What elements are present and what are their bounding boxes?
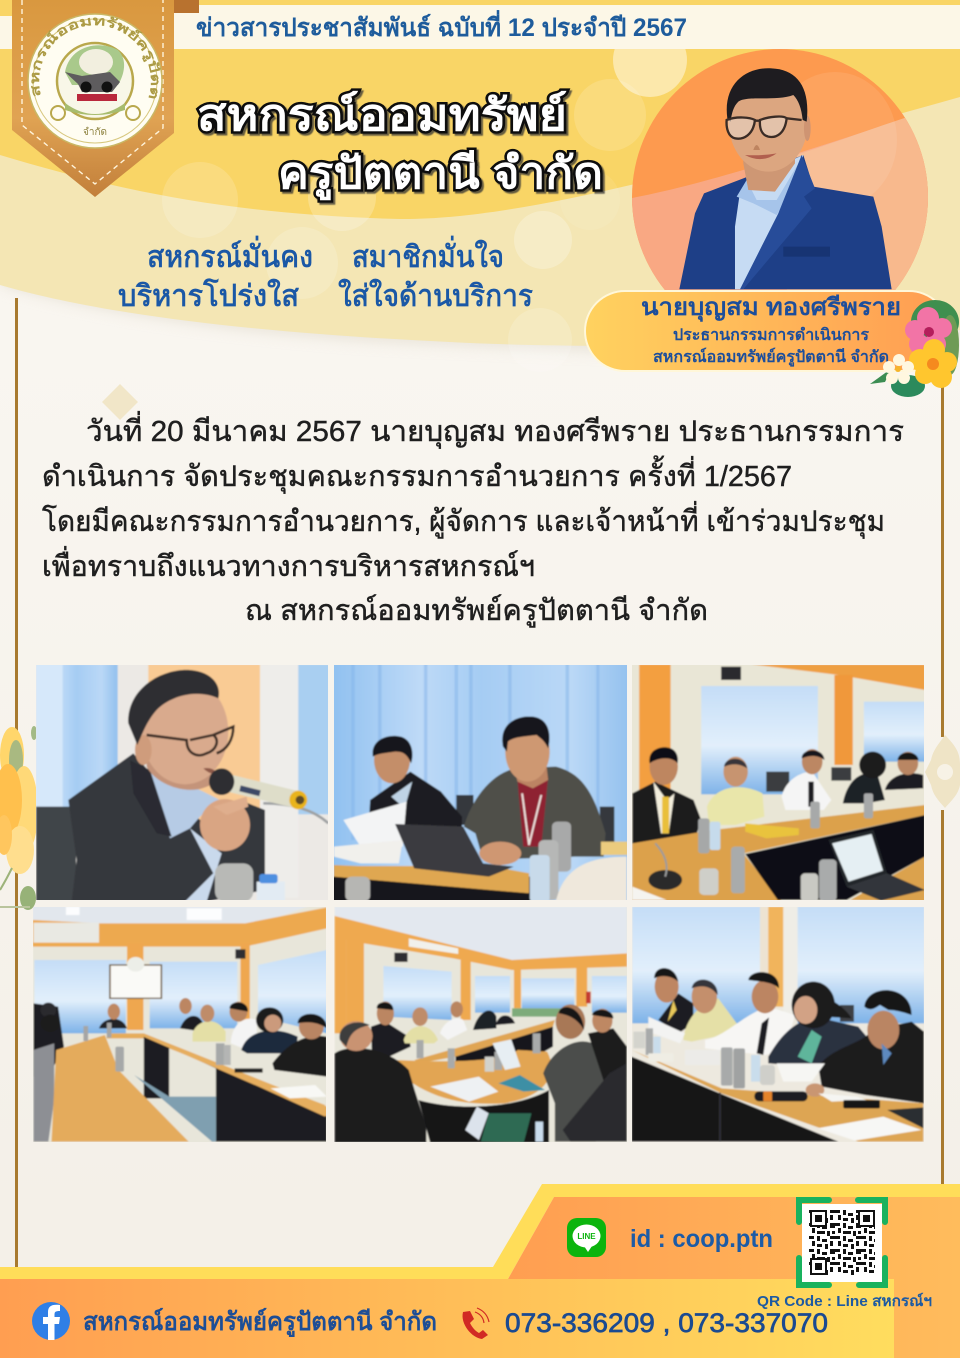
photo: chairman speaking into microphone (33, 663, 330, 902)
facebook page name: สหกรณ์ออมทรัพย์ครูปัตตานี จำกัด (83, 1307, 437, 1338)
phone numbers: 073-336209 , 073-337070 (505, 1308, 828, 1338)
QR caption: QR Code : Line สหกรณ์ฯ (757, 1292, 932, 1310)
slogan (118, 236, 533, 313)
body announcement text: ดำเนินการ จัดประชุมคณะกรรมการอำนวยการ ครั้งที่ 1/2567 (42, 455, 792, 494)
ribbon with cooperative logo (12, 0, 199, 197)
chairman name plate: นายบุญสม ทองศรีพราย (641, 294, 901, 323)
body announcement text: เพื่อทราบถึงแนวทางการบริหารสหกรณ์ฯ (42, 546, 535, 583)
vertical frame lines (15, 298, 944, 1268)
footer contact bar (0, 1279, 894, 1358)
newsletter issue heading: ข่าวสารประชาสัมพันธ์ ฉบับที่ 12 ประจำปี 2567 (196, 10, 687, 42)
main title (197, 90, 603, 200)
chairman name plate: ประธานกรรมการดำเนินการ (673, 326, 869, 344)
footer yellow band (0, 1184, 960, 1279)
chairman name plate: สหกรณ์ออมทรัพย์ครูปัตตานี จำกัด (653, 347, 889, 368)
body announcement text: ณ สหกรณ์ออมทรัพย์ครูปัตตานี จำกัด (245, 594, 708, 628)
icon: Facebook (32, 1302, 70, 1340)
slogan: ใส่ใจด้านบริการ (338, 279, 533, 313)
photo: meeting room with presentation screen (33, 906, 329, 1144)
main title: สหกรณ์ออมทรัพย์ (197, 90, 567, 140)
icon: LINE (567, 1218, 606, 1257)
tropical flower bouquet (870, 300, 959, 397)
line id: id : coop.ptn (630, 1225, 773, 1253)
slogan: บริหารโปร่งใส (118, 278, 299, 313)
left side yellow flower (0, 726, 38, 910)
body announcement text (42, 411, 904, 628)
slogan: สหกรณ์มั่นคง (147, 236, 313, 274)
QR code (799, 1200, 885, 1285)
photo: meeting table from the end (335, 907, 631, 1145)
slogan: สมาชิกมั่นใจ (352, 236, 504, 274)
footer LINE contact panel (508, 1197, 960, 1358)
logo badge: จำกัด (83, 127, 107, 138)
body announcement text: วันที่ 20 มีนาคม 2567 นายบุญสม ทองศรีพราย ประธานกรรมการ (86, 411, 904, 449)
logo badge (27, 13, 163, 149)
main title: ครูปัตตานี จำกัด (278, 149, 603, 200)
icon: LINE: LINE (577, 1232, 596, 1241)
photo: wide view of committee table (630, 663, 927, 903)
decorative ornaments (102, 384, 960, 808)
portrait of chairman (632, 49, 928, 290)
body announcement text: โดยมีคณะกรรมการอำนวยการ, ผู้จัดการ และเจ้าหน้าที่ เข้าร่วมประชุม (42, 501, 885, 539)
chairman name plate (585, 291, 949, 371)
header wave background (0, 0, 960, 372)
photo: two committee members at laptop (330, 660, 632, 907)
photo: close-up of committee members writing (632, 906, 925, 1143)
header strip (0, 5, 960, 49)
icon: telephone (463, 1308, 489, 1339)
